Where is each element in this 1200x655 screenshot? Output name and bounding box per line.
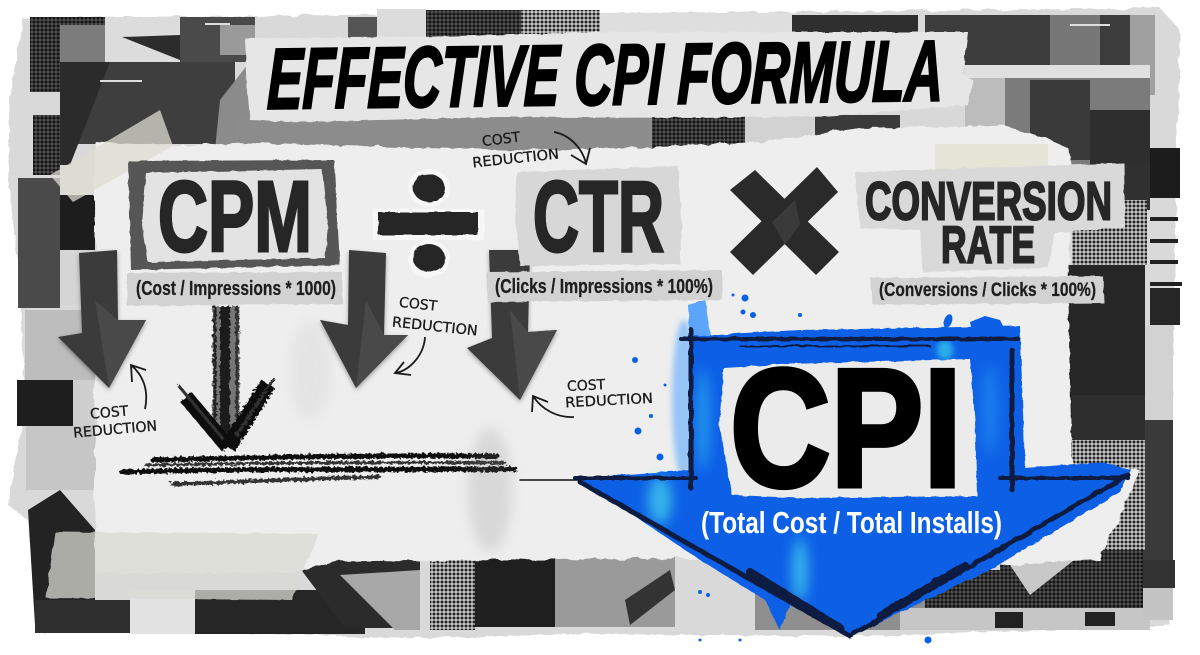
blue CPI arrow: [575, 300, 1131, 637]
tape: top right: [935, 144, 1048, 176]
CPM block: CPM: [158, 161, 312, 273]
annotation: cost reduction left: REDUCTION: [73, 418, 158, 442]
conversion formula label: [870, 276, 1104, 305]
tape: top left: [50, 110, 173, 202]
tape: bottom left: [46, 532, 318, 600]
CTR formula label: [486, 270, 722, 302]
conversion formula label: (Conversions / Clicks * 100%): [879, 280, 1096, 301]
annotation: cost reduction right: REDUCTION: [565, 391, 653, 411]
CPM formula label: (Cost / Impressions * 1000): [136, 278, 336, 300]
CPM formula label: [127, 272, 343, 306]
CTR block: [515, 161, 682, 273]
annotation: cost reduction top: [472, 130, 590, 171]
main torn paper panel: [95, 125, 1140, 580]
folded arrow 1: [58, 250, 146, 388]
folded arrow 2: [320, 250, 408, 388]
annotation: cost reduction top: COST: [481, 130, 522, 150]
annotation: cost reduction middle: [391, 295, 478, 375]
annotation: cost reduction top: REDUCTION: [472, 146, 560, 171]
charcoal equals line: [122, 320, 590, 552]
CPI paper: CPI: [730, 334, 962, 522]
multiply symbol: tape cross: [730, 167, 839, 275]
CTR block: CTR: [533, 161, 664, 273]
annotation: cost reduction right: COST: [567, 377, 606, 395]
CPI formula label: (Total Cost / Total Installs): [701, 505, 1002, 540]
folded arrow 3: [467, 250, 557, 400]
CTR formula label: (Clicks / Impressions * 100%): [495, 276, 713, 298]
annotation: cost reduction left: COST: [89, 403, 129, 423]
annotation: cost reduction right: [532, 377, 653, 417]
division symbol: [373, 169, 485, 278]
annotation: cost reduction middle: REDUCTION: [391, 315, 478, 339]
conversion rate block: RATE: [941, 216, 1035, 274]
blue paint splatter: [632, 294, 1005, 644]
annotation: cost reduction left: [73, 365, 158, 442]
conversion rate block: [855, 163, 1125, 274]
charcoal arrow: [178, 306, 274, 447]
annotation: cost reduction middle: COST: [398, 295, 438, 315]
